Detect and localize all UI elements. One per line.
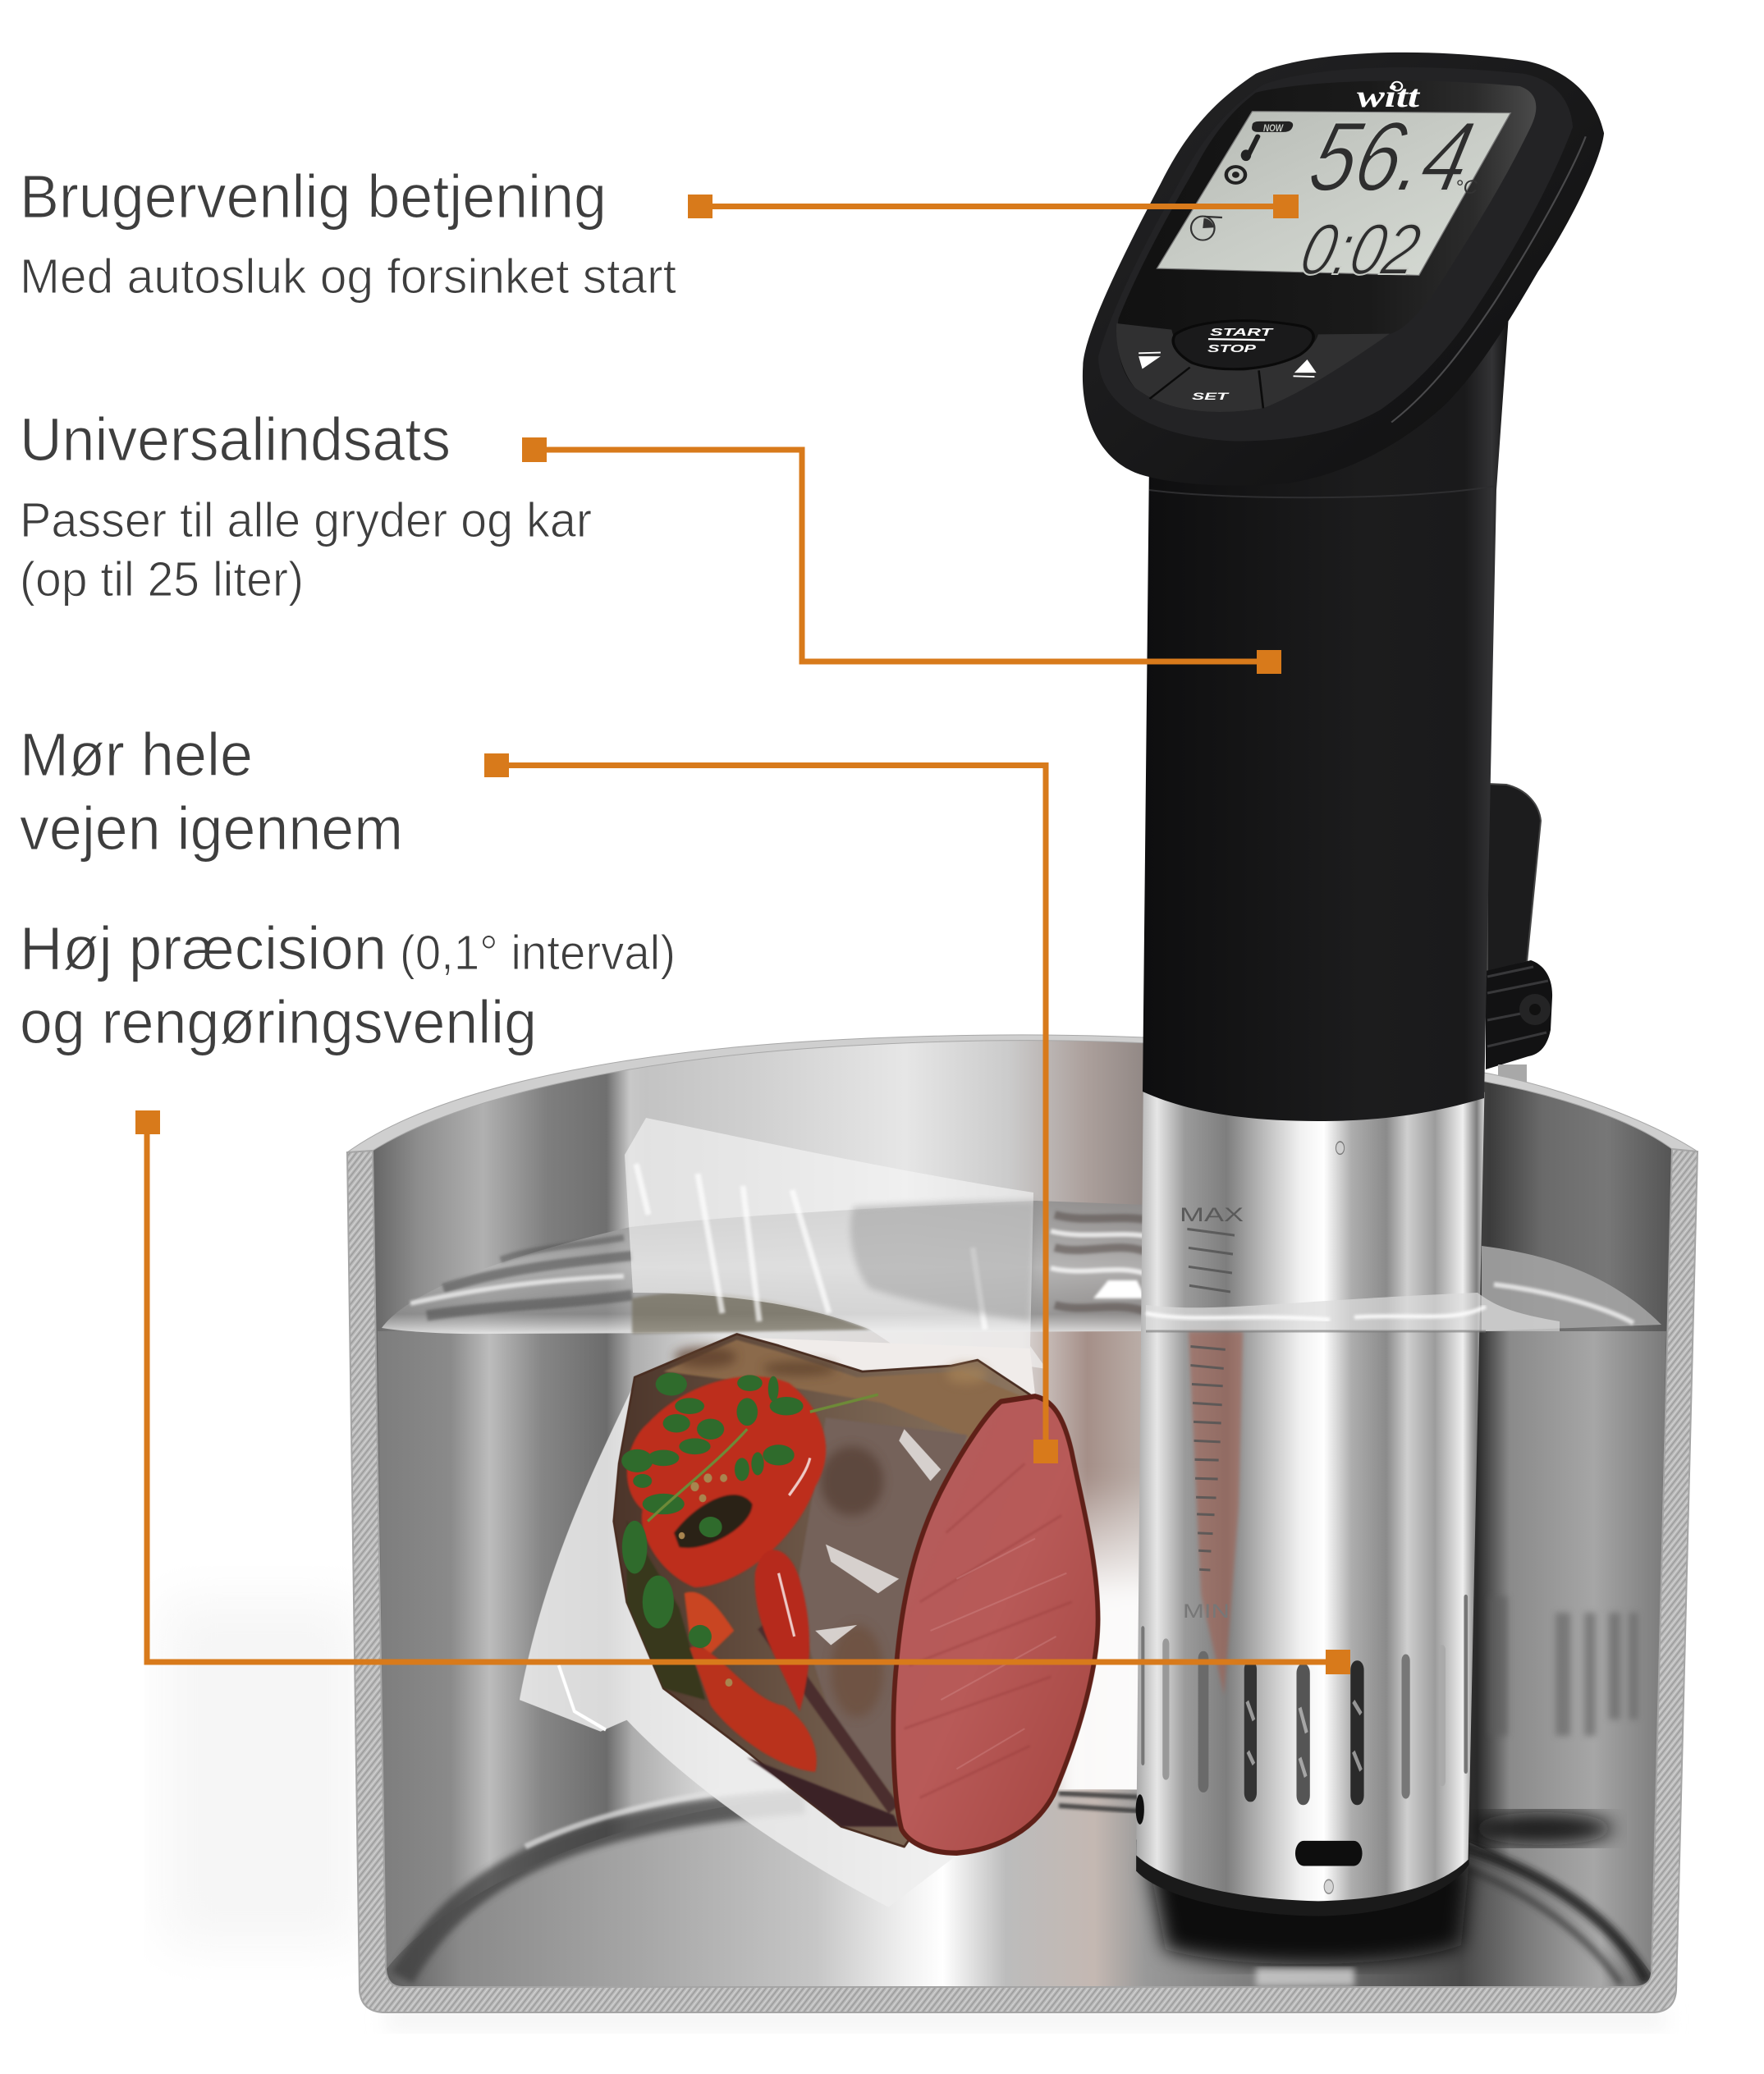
head bevel [1098,67,1573,442]
steel cylinder [1136,1086,1484,1916]
pot cut section [347,1149,1698,2012]
description line 2: (op til 25 liter) [20,552,304,607]
roast crust [627,1339,1024,1827]
heading: Universalindsats [20,405,451,474]
black column [1143,315,1509,1121]
shadow band on right wall [1473,1812,1613,1845]
callout: Brugervenlig betjening [20,163,676,304]
display degree unit: °C [1455,176,1478,199]
pot back wall [373,1041,1672,1987]
pot interior [373,1041,1672,1987]
intake slots [1136,1595,1468,1866]
light behind roast [1055,1477,1157,1822]
leader: universal clamp [522,437,1281,674]
pot rim [347,1035,1698,1152]
floor reflection under heater [1256,1968,1354,1986]
display timer: 0:02 [1293,208,1428,290]
underwater wall [378,1331,1666,1987]
heater clip behind pot [1486,784,1552,1084]
NOW badge: NOW [1263,122,1284,134]
leader: display [688,195,1299,218]
description line 1: Passer til alle gryder og kar [20,493,592,547]
callout: Universalindsats [20,405,592,607]
SET label: SET [1192,391,1230,402]
roast mottling [674,1347,988,1717]
water surface front [1146,1293,1560,1331]
display temperature: 56.4 [1300,102,1483,212]
witt logo: witt [1357,80,1421,114]
bag lower sheet [520,1383,956,1907]
heading line 1: Mør hele [20,721,253,789]
START label: START [1210,326,1274,338]
tomato slices [627,1376,826,1772]
bezel and face [1117,80,1536,412]
heading: Brugervenlig betjening [20,163,607,231]
MAX label: MAX [1180,1204,1244,1226]
water ripples [410,1215,1146,1316]
water surface back [382,1201,1661,1334]
white bag below water [694,1337,1035,1394]
leader: meat [484,753,1058,1463]
screws [1336,1142,1345,1154]
vacuum bag lower and roast [520,1334,1098,1907]
right wall blurred slots reflection [1490,1596,1638,1736]
LCD screen [1157,112,1510,275]
vacuum bag top [625,1118,1047,1369]
callout: Mør hele vejen igennem [20,721,403,863]
interval note: (0,1° interval) [400,926,676,980]
button panel [1116,323,1390,412]
heater shadow on floor [1149,1863,1469,1964]
floor ring [402,1802,804,1978]
cut face of roast [893,1396,1098,1853]
callout: Høj præcision [20,914,676,1056]
description: Med autosluk og forsinket start [20,250,676,304]
refracted roast in water [632,1293,870,1334]
STOP label: STOP [1207,342,1257,355]
control head [1083,53,1604,486]
herbs [621,1372,803,1648]
sous vide heater [1083,53,1604,1916]
heading line 2: vejen igennem [20,794,403,863]
scale marks [1187,1229,1235,1570]
faint glow behind pot [164,1600,1666,2031]
heading line 2: og rengøringsvenlig [20,988,537,1056]
pot floor [386,1789,1652,1987]
meat body [614,1334,1030,1847]
leader: precision [135,1110,1350,1674]
heading line 1: Høj præcision [20,914,387,982]
MIN label: MIN [1183,1600,1230,1623]
